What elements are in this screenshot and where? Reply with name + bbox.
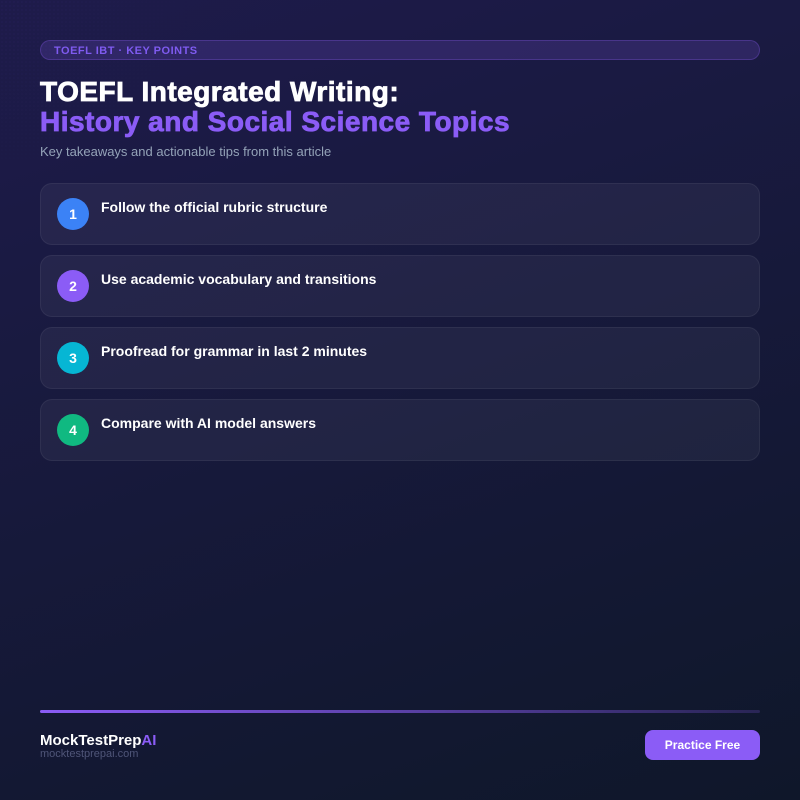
number badge 4 xyxy=(57,414,89,446)
tip 1 text: Follow the official rubric structure xyxy=(101,199,327,215)
tip 4 text: Compare with AI model answers xyxy=(101,415,316,431)
footer brand: mocktestprepai.com xyxy=(40,748,138,760)
card: tip 2 xyxy=(40,255,760,317)
title: TOEFL Integrated Writing: xyxy=(40,76,399,107)
footer brand xyxy=(40,732,156,760)
call-to-action button xyxy=(645,730,760,760)
tip 3 text: Proofread for grammar in last 2 minutes xyxy=(101,343,367,359)
number badge 2: 2 xyxy=(69,278,77,294)
card: tip 4 xyxy=(40,399,760,461)
badge: TOEFL iBT key points xyxy=(40,40,760,60)
number badge 3: 3 xyxy=(69,350,77,366)
card: tip 1 xyxy=(40,183,760,245)
number badge 2 xyxy=(57,270,89,302)
title: History and Social Science Topics xyxy=(40,106,510,137)
number badge 3 xyxy=(57,342,89,374)
tip 2 text: Use academic vocabulary and transitions xyxy=(101,271,376,287)
number badge 1: 1 xyxy=(69,206,77,222)
number badge 4: 4 xyxy=(69,422,77,438)
card: tip 3 xyxy=(40,327,760,389)
subtitle: Key takeaways and actionable tips from this article xyxy=(40,144,331,159)
title xyxy=(40,76,510,138)
number badge 1 xyxy=(57,198,89,230)
footer brand: MockTestPrepAI xyxy=(40,732,156,749)
badge: TOEFL iBT key points: TOEFL IBT · KEY POINTS xyxy=(54,44,198,56)
call-to-action button: Practice Free xyxy=(665,738,740,752)
